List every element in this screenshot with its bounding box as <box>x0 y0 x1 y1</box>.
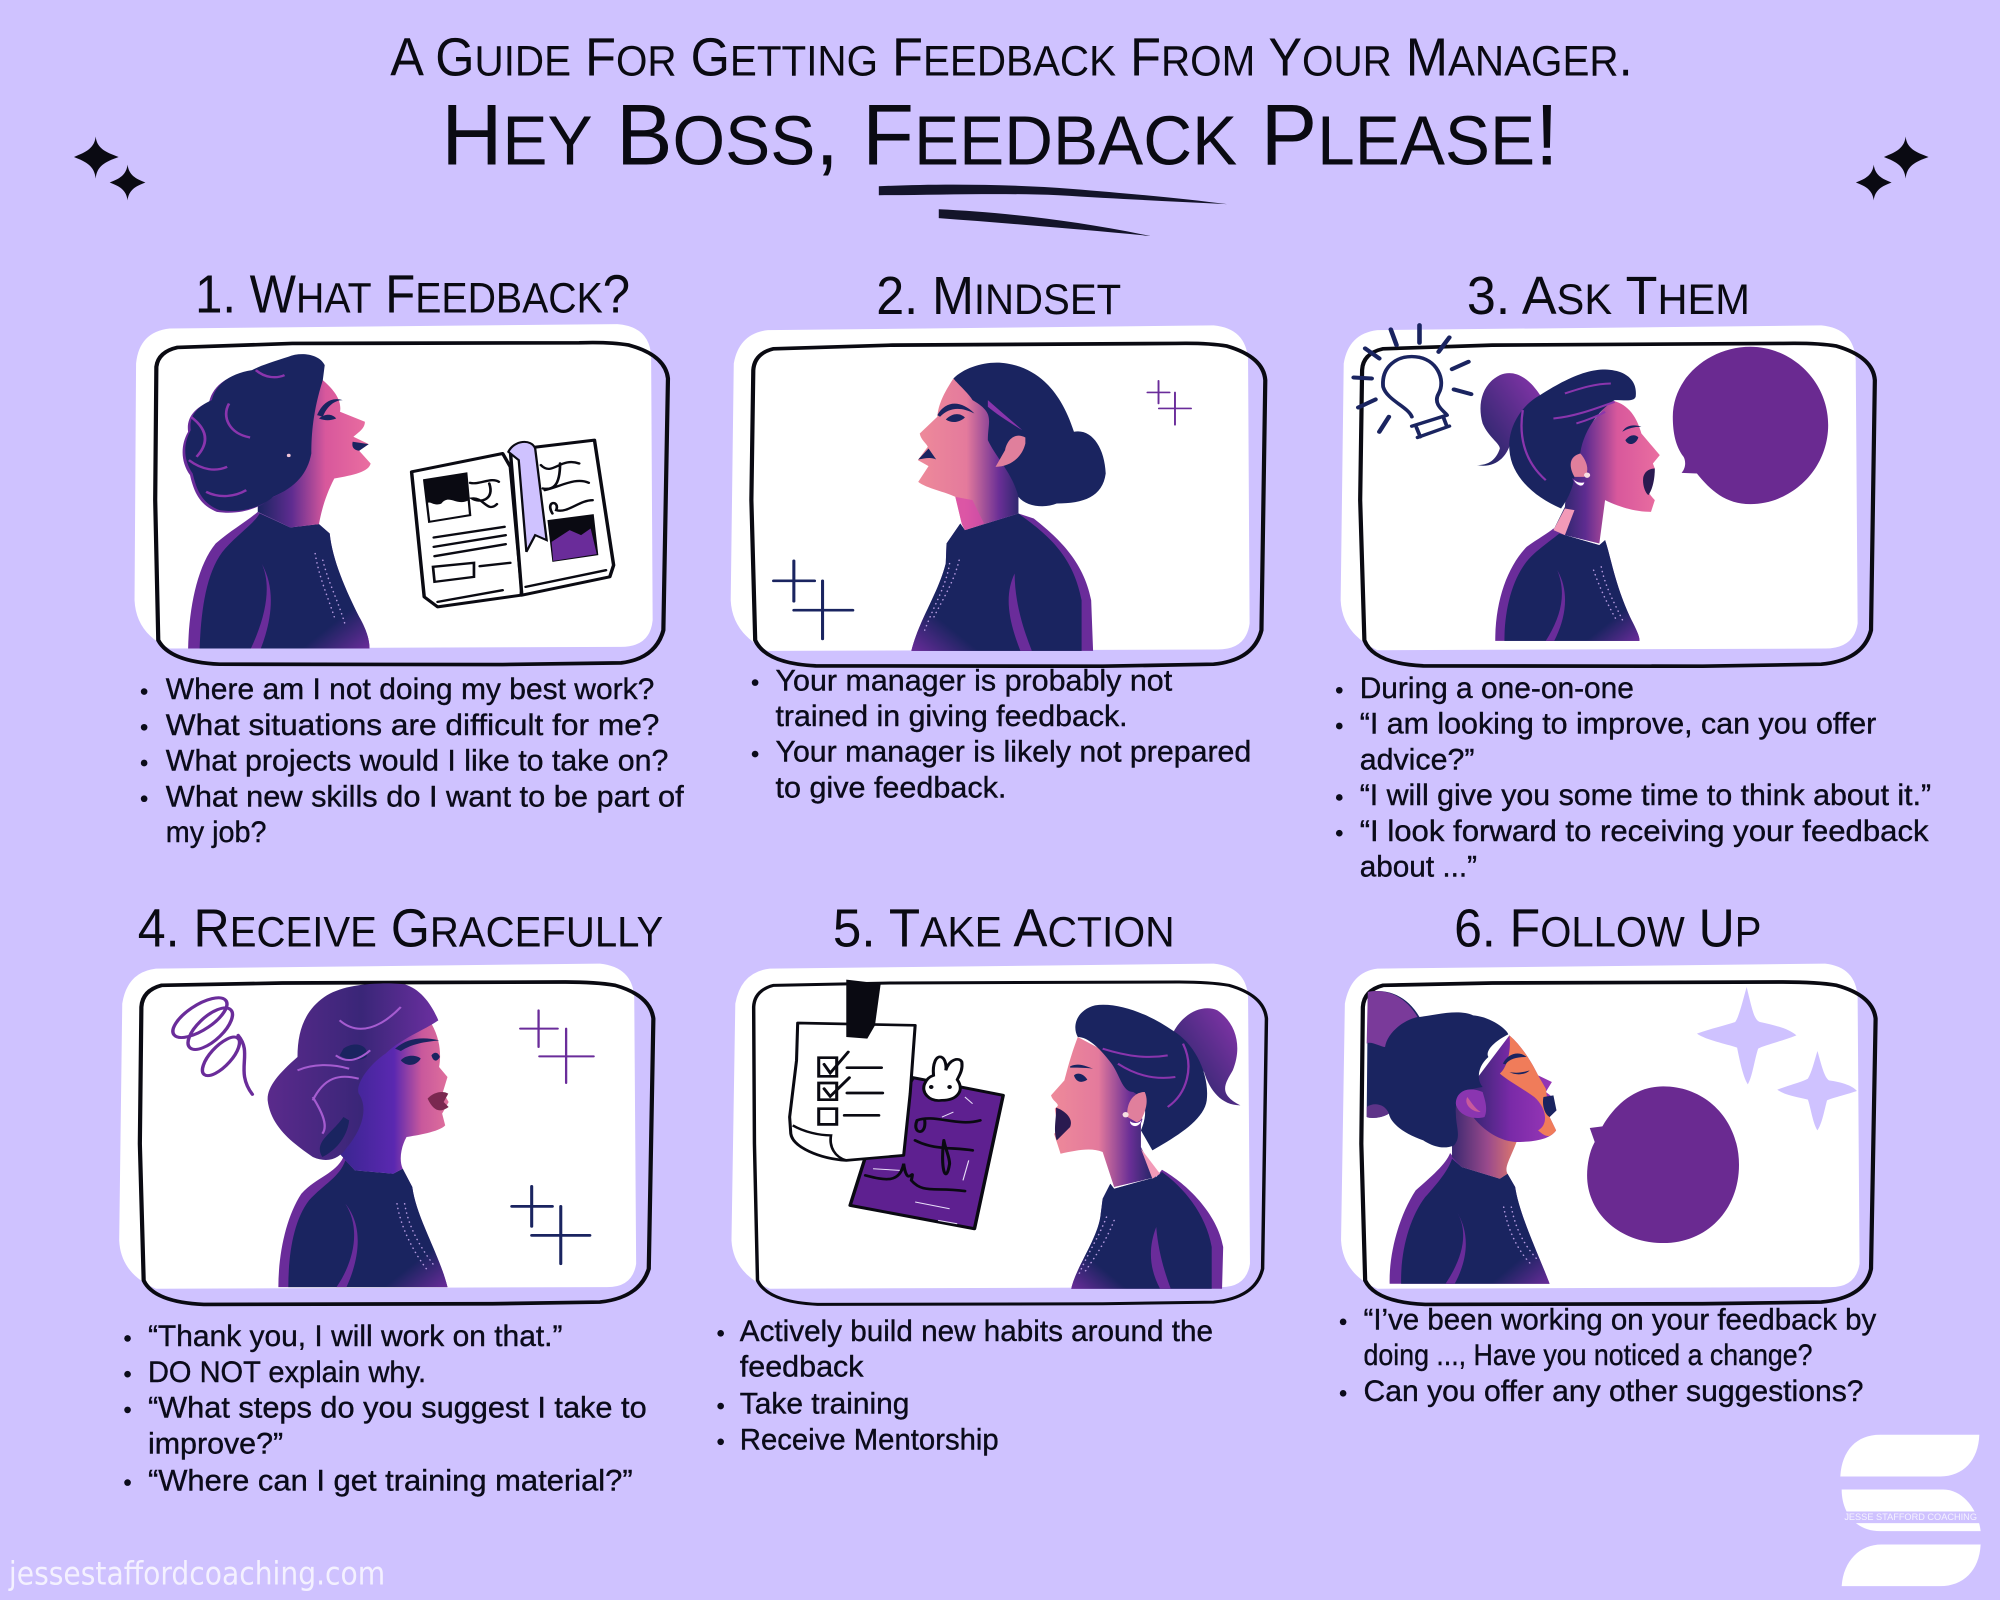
bullet list: Your manager is likely not prepared <box>776 736 1251 769</box>
panel: 4 receive gracefully <box>119 900 663 1497</box>
bullet list: advice?” <box>1360 743 1474 776</box>
bullet list: my job? <box>166 816 267 849</box>
illustration: woman speaking with lightbulb and speech bubble <box>1341 325 1875 666</box>
bullet list: “I will give you some time to think about it.” <box>1360 779 1931 812</box>
bullet list: about ...” <box>1360 851 1477 884</box>
bullet list <box>141 673 684 849</box>
bullet list: What projects would I like to take on? <box>166 745 668 778</box>
logo: JESSE STAFFORD COACHING <box>1844 1512 1977 1522</box>
bullet list: What situations are difficult for me? <box>166 709 659 742</box>
bullet list: “I’ve been working on your feedback by <box>1364 1304 1876 1337</box>
panel: 1 what feedback <box>135 266 684 849</box>
heading: 4. RECEIVE GRACEFULLY <box>138 900 663 959</box>
bullet list <box>1340 1304 1876 1408</box>
title underline strokes <box>879 185 1227 236</box>
bullet list <box>124 1320 647 1497</box>
bullet list: trained in giving feedback. <box>776 700 1128 733</box>
bullet list <box>717 1315 1213 1456</box>
heading: 5. TAKE ACTION <box>833 900 1175 959</box>
bullet list: “Where can I get training material?” <box>148 1464 633 1497</box>
heading: 3. ASK THEM <box>1467 267 1750 326</box>
icon: right sparkles <box>1856 137 1929 200</box>
heading: 1. WHAT FEEDBACK? <box>195 266 630 325</box>
icon: left sparkles <box>74 137 145 200</box>
bullet list: Receive Mentorship <box>740 1423 999 1456</box>
bullet list: feedback <box>740 1351 865 1384</box>
bullet list: What new skills do I want to be part of <box>166 780 684 813</box>
bullet list: Your manager is probably not <box>776 664 1173 697</box>
subtitle: A GUIDE FOR GETTING FEEDBACK FROM YOUR MANAGER. <box>390 28 1633 87</box>
bullet list: During a one-on-one <box>1360 672 1634 705</box>
panel: 3 ask them <box>1336 267 1931 884</box>
title: HEY BOSS, FEEDBACK PLEASE! <box>441 87 1559 184</box>
bullet list: “Thank you, I will work on that.” <box>148 1320 562 1353</box>
bullet list: Can you offer any other suggestions? <box>1364 1375 1864 1408</box>
illustration: woman with speech bubble and stars <box>1341 964 1876 1304</box>
bullet list: Actively build new habits around the <box>740 1315 1213 1348</box>
bullet list <box>1336 672 1931 884</box>
bullet list: “I am looking to improve, can you offer <box>1360 708 1876 741</box>
illustration: woman with scribble and sparkles <box>119 964 653 1304</box>
logo <box>1840 1435 1982 1586</box>
website address: jessestaffordcoaching.com <box>8 1555 385 1593</box>
bullet list: “What steps do you suggest I take to <box>148 1392 647 1425</box>
panel: 2 mindset <box>731 267 1265 804</box>
heading: 2. MINDSET <box>876 267 1121 326</box>
panel: 6 follow up <box>1340 900 1876 1408</box>
illustration: woman and open book <box>135 324 668 665</box>
bullet list <box>752 664 1251 804</box>
illustration: checklist, note and woman speaking <box>731 964 1266 1304</box>
illustration: woman facing left with sparkles <box>731 325 1265 666</box>
bullet list: doing ..., Have you noticed a change? <box>1364 1339 1812 1372</box>
heading: 6. FOLLOW UP <box>1454 900 1761 959</box>
bullet list: DO NOT explain why. <box>148 1356 426 1389</box>
bullet list: Take training <box>740 1388 909 1421</box>
bullet list: “I look forward to receiving your feedback <box>1360 815 1930 848</box>
bullet list: improve?” <box>148 1427 283 1460</box>
panel: 5 take action <box>717 900 1266 1456</box>
bullet list: to give feedback. <box>776 771 1006 804</box>
bullet list: Where am I not doing my best work? <box>166 673 654 706</box>
